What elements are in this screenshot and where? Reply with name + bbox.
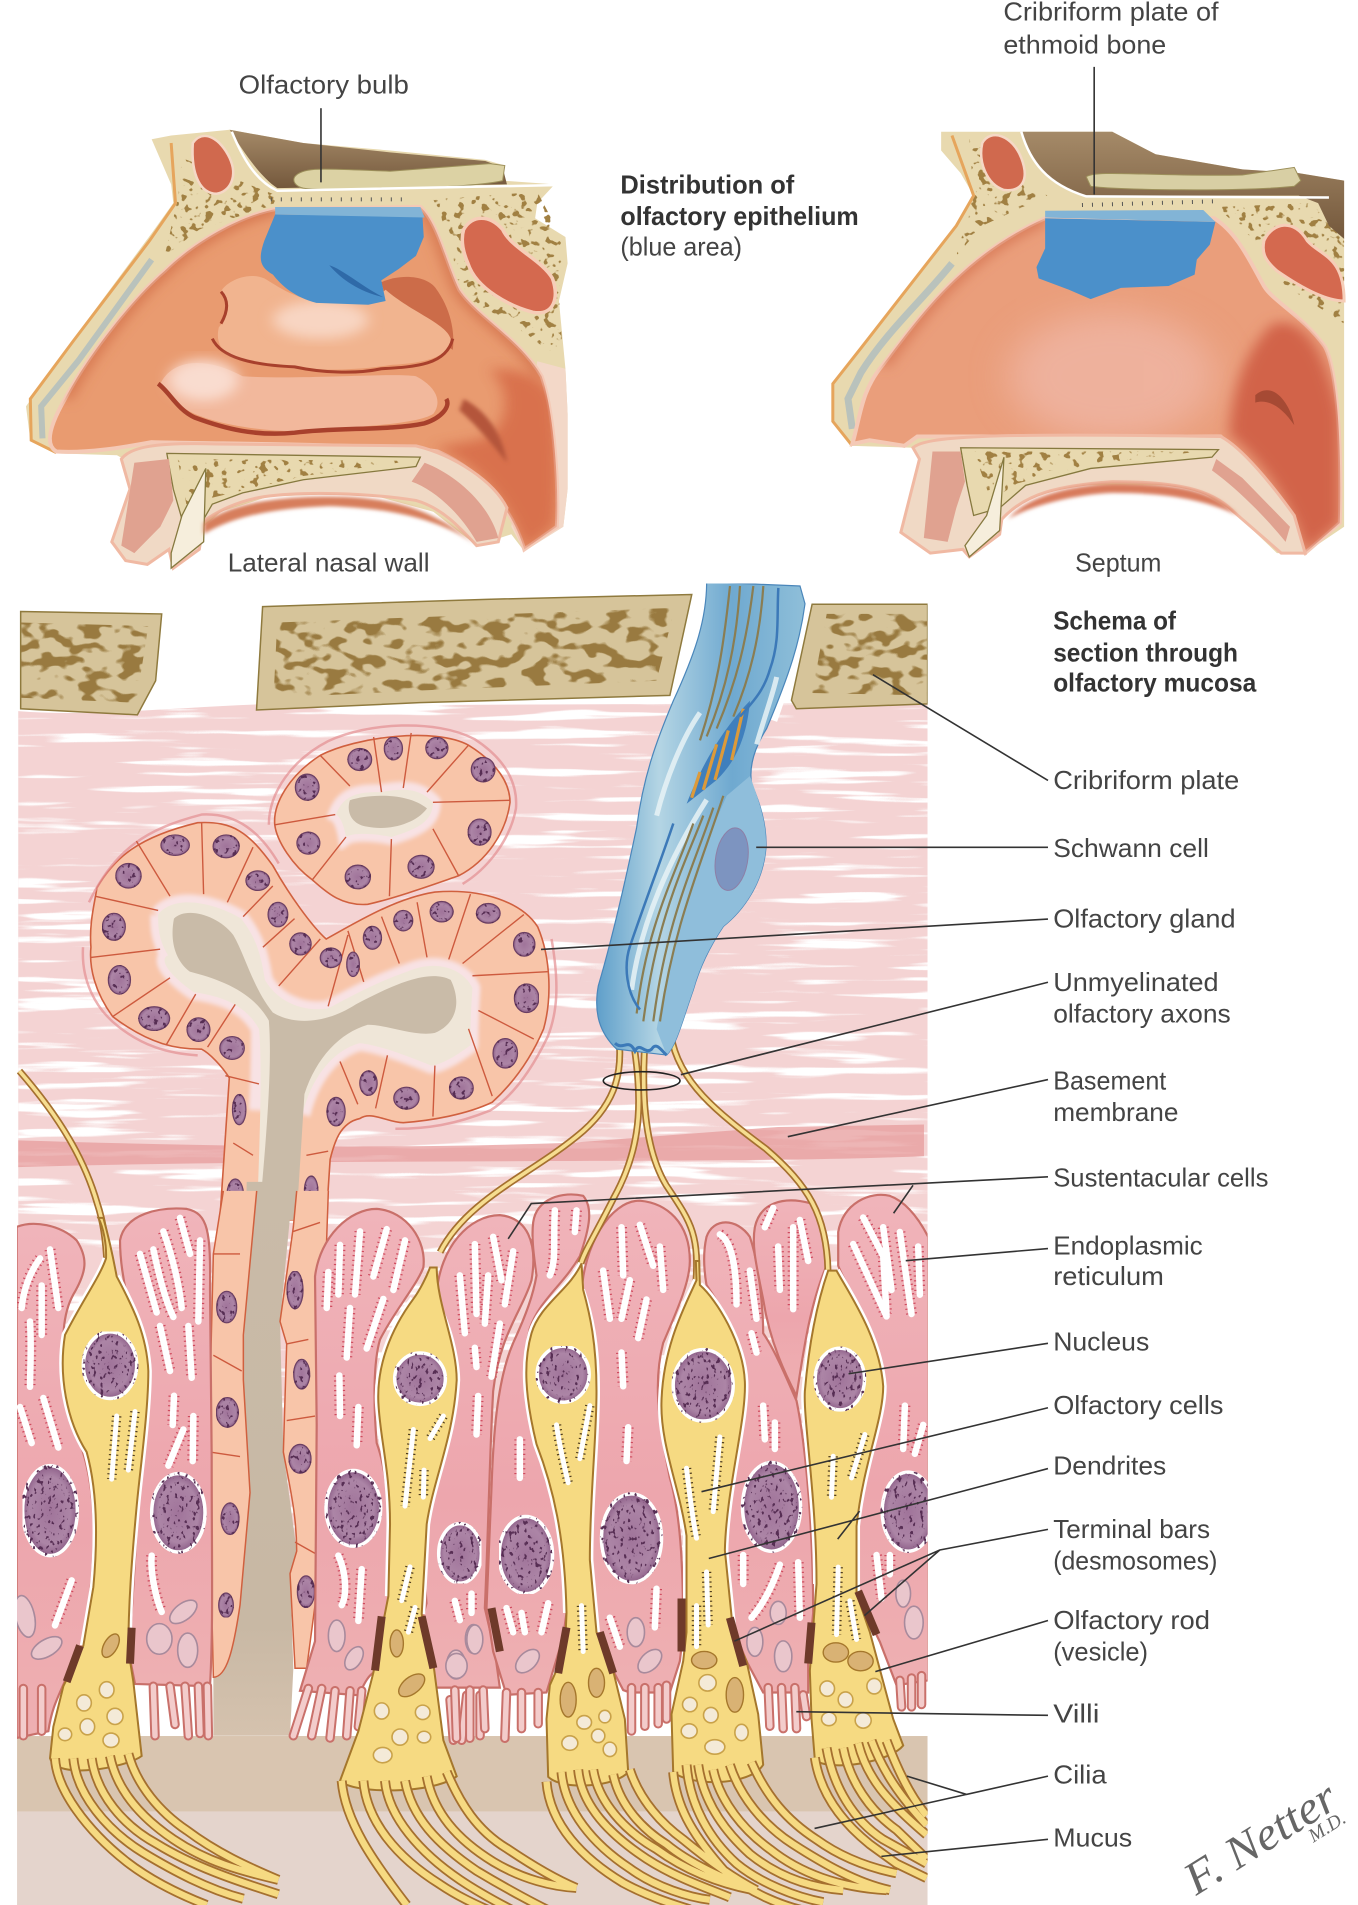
inferior concha highlight	[169, 359, 238, 401]
right reticulum lumen	[455, 1208, 923, 1647]
cell nuclei left	[23, 1332, 481, 1583]
right yellow reticulum lumen	[557, 1406, 865, 1651]
leader: sustentacular cells	[508, 1177, 1048, 1239]
leader: cribriform plate	[873, 675, 1048, 780]
under-palate shadow on septum	[1008, 483, 1238, 519]
label: villi: Villi	[1053, 1701, 1099, 1729]
label: endoplasmic reticulum: Endoplasmic	[1053, 1233, 1203, 1261]
cribriform bone plate middle	[257, 594, 692, 710]
label: basement membrane: membrane	[1053, 1099, 1178, 1127]
label: cribriform plate of ethmoid bone	[1003, 0, 1220, 59]
pink cell reticulum lumen	[20, 1218, 405, 1625]
yellow cell reticulum lumen	[112, 1412, 443, 1632]
leader: basement membrane	[788, 1080, 1048, 1137]
heading: schema of section through olfactory mucosa	[1053, 608, 1257, 698]
tooth on septum	[965, 457, 1004, 557]
lateral wall mucosa	[50, 207, 557, 549]
nasal cartilage stripe	[41, 260, 152, 438]
heading: schema of section through olfactory mucosa: Schema of	[1053, 608, 1176, 636]
pharyngeal wall shading	[433, 369, 558, 551]
exposed axons	[692, 709, 743, 798]
palate of septum	[901, 435, 1305, 557]
leader: dendrites	[709, 1469, 1048, 1559]
olfactory bulb shape	[294, 164, 505, 190]
olfactory cells	[50, 1218, 927, 1905]
lower acinus outer wall	[91, 822, 549, 1220]
mucus upper layer	[17, 1736, 928, 1815]
middle concha edge	[212, 292, 453, 372]
label: olfactory rod	[1053, 1607, 1210, 1667]
blue shadow	[329, 265, 383, 297]
bundle white gap	[673, 582, 805, 721]
right yellow reticulum ticks	[557, 1406, 865, 1651]
septum nasal ridge edge	[833, 135, 974, 446]
upper acinus lumen	[336, 790, 433, 837]
leader: cilia	[815, 1776, 1048, 1828]
lateral wall silhouette	[26, 130, 568, 568]
nasal bone speckles	[165, 158, 563, 361]
inner cytoplasm glow	[158, 902, 472, 1115]
septum bone speckles	[956, 139, 1344, 324]
cribriform perforations	[271, 197, 403, 201]
middle nasal concha	[218, 276, 451, 370]
label: unmyelinated olfactory axons	[1053, 969, 1231, 1028]
upper lumen secretion	[349, 796, 427, 828]
label: Schwann cell: Schwann cell	[1053, 835, 1209, 863]
yellow cell reticulum ticks	[112, 1412, 443, 1632]
leader: terminal bars	[734, 1529, 1048, 1641]
right vesicles	[562, 1675, 882, 1757]
right mitochondria	[446, 1580, 923, 1678]
cribriform bone plate right	[791, 604, 928, 709]
leader: cribriform plate of ethmoid	[1093, 67, 1095, 195]
duct nuclei	[216, 1271, 315, 1617]
duct right cell wall	[280, 1191, 328, 1668]
palate bone speckles	[178, 459, 412, 504]
inferior nasal concha	[160, 363, 437, 431]
sphenoid sinus	[462, 218, 555, 313]
upper lip muscle	[121, 459, 173, 553]
right cell nuclei	[499, 1346, 934, 1594]
lumen secretion	[173, 913, 456, 1220]
palate bone	[167, 453, 420, 519]
label: nucleus: Nucleus	[1053, 1329, 1149, 1357]
dark blue exposed window	[687, 701, 750, 804]
leader: Schwann cell	[756, 846, 1048, 848]
lip muscle on septum	[924, 452, 965, 542]
frontal sinus	[193, 136, 233, 194]
leader: olfactory rod	[875, 1621, 1048, 1672]
label: terminal bars: Terminal bars	[1053, 1516, 1210, 1544]
label: olfactory rod: Olfactory rod	[1053, 1607, 1210, 1635]
meatus shadow	[459, 399, 507, 463]
inferior concha edge	[158, 384, 447, 434]
mucosa edge shading	[65, 207, 542, 399]
leader: endoplasmic reticulum	[906, 1249, 1048, 1261]
Schwann cell and axon bundle	[597, 582, 805, 1090]
label: olfactory gland: Olfactory gland	[1053, 906, 1236, 934]
cribriform line	[232, 132, 555, 191]
terminal bars left	[67, 1616, 433, 1682]
middle concha highlight	[273, 301, 368, 339]
septal upper-left red shading	[883, 218, 1045, 365]
brain dura on septum	[1021, 132, 1344, 239]
heading: schema of section through olfactory mucosa: olfactory mucosa	[1053, 670, 1257, 698]
leader: villi	[796, 1712, 1048, 1715]
label: olfactory bulb: Olfactory bulb	[239, 72, 409, 100]
label: endoplasmic reticulum: reticulum	[1053, 1263, 1164, 1291]
sustentacular cell bodies right	[416, 1194, 928, 1738]
leader: nucleus	[849, 1343, 1048, 1374]
base scallops	[615, 1043, 667, 1055]
heading: distribution of olfactory epithelium: olfactory epithelium	[620, 203, 859, 231]
blue strip on septum	[1045, 210, 1215, 222]
label: mucus: Mucus	[1053, 1825, 1132, 1853]
right yellow mitochondria	[560, 1643, 873, 1717]
septal cartilage stripe	[848, 263, 952, 429]
label: unmyelinated olfactory axons: Unmyelinated	[1053, 969, 1219, 997]
heading: distribution of olfactory epithelium: (blue area)	[620, 233, 742, 261]
concha shadow near blue area	[381, 277, 453, 350]
pink cell reticulum ticks	[20, 1218, 405, 1625]
yellow mitochondria left	[99, 1630, 427, 1701]
bone pores middle	[274, 608, 675, 698]
endoplasmic reticulum, nuclei and organelles	[11, 1208, 934, 1763]
posterior muscle on septum	[1212, 459, 1290, 542]
panel: section through olfactory mucosa	[11, 582, 934, 1905]
brain dura	[230, 130, 507, 188]
label: terminal bars	[1053, 1516, 1217, 1575]
label: basement membrane: Basement	[1053, 1067, 1166, 1095]
gland nuclei	[102, 737, 539, 1212]
heading: distribution of olfactory epithelium	[620, 171, 859, 261]
palate bone on septum	[961, 448, 1218, 515]
upper inner glow	[336, 790, 433, 837]
choana shading	[1229, 322, 1340, 553]
label: unmyelinated olfactory axons: olfactory axons	[1053, 1000, 1231, 1028]
olfactory cell bodies right	[526, 1261, 927, 1905]
incisor tooth	[171, 468, 206, 568]
duct left cell wall	[208, 1191, 257, 1677]
blue olfactory area on septum	[1036, 218, 1215, 299]
leader: olfactory bulb	[320, 108, 322, 182]
leader: olfactory cells	[701, 1408, 1048, 1492]
leader: olfactory gland	[541, 919, 1048, 949]
upper acinus	[275, 735, 510, 905]
label: olfactory cells: Olfactory cells	[1053, 1392, 1223, 1420]
villi of left cells	[23, 1686, 480, 1740]
lower acinus cell borders	[91, 823, 548, 1155]
bone pores right	[812, 614, 928, 695]
duct lumen	[213, 1182, 297, 1736]
blue upper strip	[275, 207, 425, 217]
duct trace group	[208, 1182, 328, 1736]
organelles in left cells	[11, 1218, 481, 1763]
cribriform white line	[1021, 132, 1329, 198]
duct cell dividers	[210, 1222, 320, 1553]
dark blue fold	[627, 588, 778, 1010]
leader: mucus	[881, 1839, 1048, 1856]
Schwann right lobe	[657, 776, 766, 1055]
bone pores left	[21, 622, 148, 703]
under-palate shadow	[204, 497, 477, 546]
sustentacular cell bodies left	[17, 1208, 480, 1740]
vesicles left	[58, 1682, 431, 1763]
cilia of cells 3 to 5	[547, 1741, 927, 1905]
right reticulum ticks	[455, 1208, 923, 1647]
septum silhouette	[833, 132, 1344, 557]
axon fibers	[637, 586, 763, 1021]
axon bundle encircled	[603, 1072, 680, 1090]
lower acinus lumen	[158, 902, 472, 1220]
light mauve wash	[1008, 312, 1216, 440]
label: endoplasmic reticulum	[1053, 1233, 1203, 1291]
palate bone speckles on septum	[974, 452, 1199, 500]
heading: schema of section through olfactory mucosa: section through	[1053, 639, 1238, 667]
signature: F. Netter	[1174, 1770, 1347, 1905]
sphenoid sinus	[1263, 225, 1344, 301]
septal mucosa	[852, 218, 1340, 553]
mucus lower layer	[17, 1811, 928, 1905]
heading: distribution of olfactory epithelium: Distribution of	[620, 171, 795, 199]
sustentacular cells	[17, 1194, 928, 1740]
villi of right cells	[455, 1676, 922, 1738]
label: basement membrane	[1053, 1067, 1178, 1127]
right terminal bars	[491, 1591, 877, 1673]
gland trace group	[83, 725, 556, 1220]
gland fibrous sheath	[83, 814, 556, 1129]
white highlights	[632, 677, 777, 990]
Schwann nucleus	[710, 824, 753, 894]
frontal sinus	[981, 135, 1025, 190]
signature: M.D.	[1304, 1808, 1350, 1847]
choana notch	[1255, 390, 1294, 425]
septum cribriform perforations	[1082, 201, 1216, 205]
panel: lateral nasal wall illustration	[26, 130, 568, 568]
soft palate muscle	[412, 463, 498, 542]
organelles in right cells	[446, 1208, 934, 1757]
hard palate mucosa	[112, 444, 507, 568]
label: lateral nasal wall: Lateral nasal wall	[228, 549, 430, 577]
olfactory gland and duct	[83, 725, 556, 1736]
leader: unmyelinated axons	[681, 982, 1048, 1075]
cilia of cells 1 and 2	[55, 1754, 576, 1905]
label: sustentacular cells: Sustentacular cells	[1053, 1165, 1268, 1193]
nasal ridge edge	[30, 143, 175, 453]
label: septum: Septum	[1075, 549, 1161, 577]
olfactory axons	[19, 1033, 828, 1289]
upper acinus cell borders	[275, 733, 510, 896]
cribriform bone plate left	[21, 611, 162, 715]
Schwann cell sheath	[597, 582, 805, 1055]
mitochondria left	[11, 1592, 481, 1679]
olfactory bulb on septum	[1086, 167, 1301, 190]
label: terminal bars: (desmosomes)	[1053, 1547, 1217, 1575]
lamina propria tissue with streaks	[18, 703, 928, 1580]
pale rim behind pharyngeal wall	[511, 361, 568, 551]
blue olfactory area	[261, 214, 424, 305]
label: dendrites: Dendrites	[1053, 1453, 1166, 1481]
label: cribriform plate of ethmoid bone: ethmoid bone	[1003, 31, 1166, 59]
basement membrane band	[18, 1125, 924, 1167]
upper acinus sheath	[269, 725, 516, 884]
olfactory cell bodies left	[50, 1218, 576, 1905]
label: cilia: Cilia	[1053, 1761, 1108, 1789]
label: olfactory rod: (vesicle)	[1053, 1639, 1148, 1667]
label: cribriform plate: Cribriform plate	[1053, 767, 1239, 795]
panel: septum illustration	[833, 132, 1344, 557]
